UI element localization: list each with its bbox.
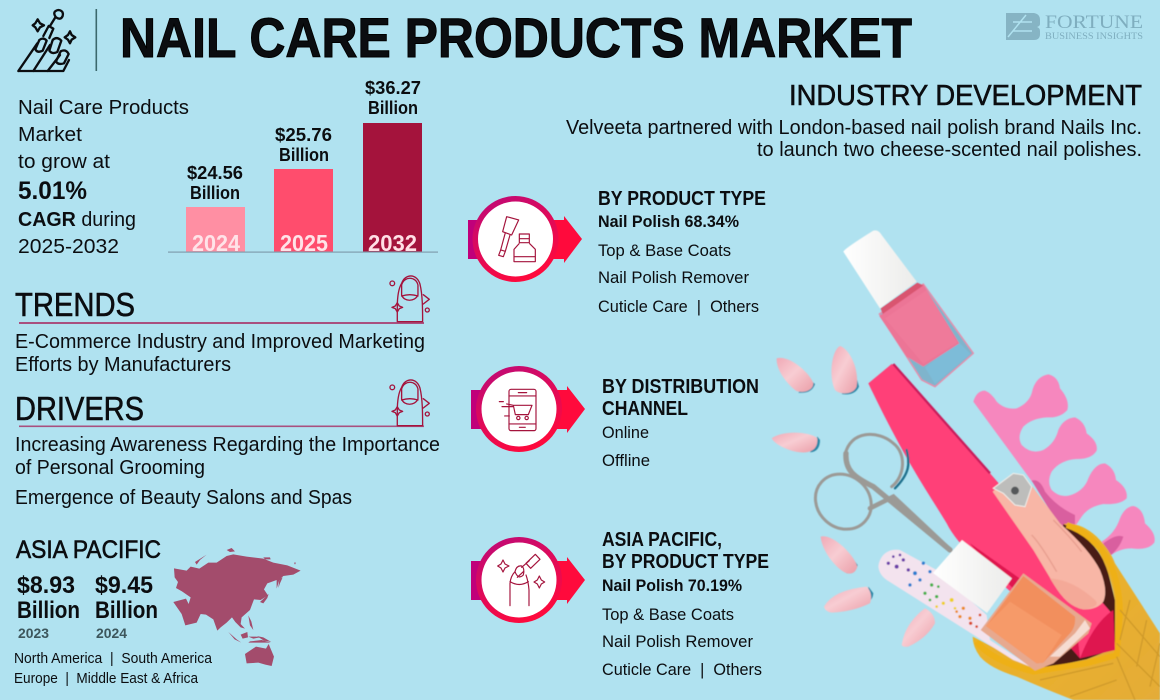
bar 2032 — [363, 78, 422, 256]
map: Asia Pacific — [173, 548, 301, 666]
bottle: pink polish — [843, 230, 973, 387]
text: Asia Pacific by product type: Top & Base Coats — [602, 605, 734, 624]
logo: Fortune Business Insights: FORTUNE — [1045, 12, 1143, 33]
text: Asia Pacific by product type — [602, 529, 769, 679]
text: CAGR summary: 5.01% — [18, 177, 87, 205]
text: trends description: E-Commerce Industry and Improved Marketing — [15, 331, 425, 353]
text: Asia Pacific by product type: Nail Polish Remover — [602, 632, 753, 651]
text: other regions: North America | South America — [14, 651, 213, 667]
badge: distribution channel — [471, 366, 585, 452]
text: by distribution channel: CHANNEL — [602, 398, 688, 420]
text: CAGR summary: 2025-2032 — [18, 236, 119, 258]
icon: nail (trends) — [390, 276, 429, 322]
text: industry development — [566, 80, 1142, 161]
text: by product type: BY PRODUCT TYPE — [598, 188, 766, 210]
value 2024 — [95, 572, 158, 641]
text: drivers description: Increasing Awareness Regarding the Importance — [15, 434, 440, 456]
scissors — [804, 434, 950, 550]
text: by product type: Cuticle Care | Others — [598, 297, 759, 316]
text: trends description — [15, 331, 425, 376]
logo: Fortune Business Insights: BUSINESS INSIGHTS — [1045, 32, 1143, 42]
bar 2025: $25.76 — [275, 125, 332, 145]
icon: polish brush and bottle — [499, 217, 535, 262]
text: by distribution channel — [602, 376, 759, 470]
text: CAGR summary: Nail Care Products — [18, 97, 189, 119]
nail file, rainbow dots — [878, 550, 1032, 667]
nail file, pink — [868, 364, 1115, 658]
logo: Fortune Business Insights — [1006, 12, 1143, 42]
text: by product type: Top & Base Coats — [598, 241, 731, 260]
icon: phone with cart — [499, 389, 536, 431]
title: NAIL CARE PRODUCTS MARKET — [120, 6, 912, 69]
value 2024: Billion — [95, 597, 158, 624]
text: drivers description: of Personal Grooming — [15, 457, 205, 479]
value 2023: $8.93 — [17, 572, 75, 599]
icon: finger with nail brush — [498, 554, 545, 606]
regional panel: Asia Pacific — [14, 536, 301, 687]
bar 2025: 2025 — [280, 230, 328, 256]
text: by product type: Nail Polish Remover — [598, 268, 749, 287]
value 2023: Billion — [17, 597, 80, 624]
ice cream cone — [973, 524, 1160, 700]
text: industry development: Velveeta partnered with London-based nail polish brand Nails Inc. — [566, 117, 1142, 139]
bar 2024: $24.56 — [187, 163, 243, 183]
text: by distribution channel: Offline — [602, 451, 650, 470]
artificial nails — [772, 346, 935, 647]
text: by distribution channel: Online — [602, 423, 649, 442]
title divider — [96, 9, 97, 71]
text: CAGR summary: to grow at — [18, 151, 110, 173]
badge: product type — [468, 196, 582, 282]
value 2023 — [17, 572, 80, 641]
bar chart: market size — [168, 78, 438, 256]
text: Asia Pacific by product type: Nail Polish 70.19% — [602, 576, 742, 595]
value 2024: 2024 — [96, 625, 127, 641]
text: drivers description — [15, 434, 440, 509]
bottle: orange polish — [933, 540, 1092, 671]
bar 2024: Billion — [190, 183, 240, 203]
text: industry development: INDUSTRY DEVELOPMENT — [789, 80, 1142, 112]
toe separator — [973, 374, 1155, 557]
value 2023: 2023 — [18, 625, 49, 641]
bar 2025 — [274, 125, 333, 256]
text: Asia Pacific by product type: Cuticle Care | Others — [602, 660, 762, 679]
text: other regions: Europe | Middle East & Africa — [14, 671, 199, 687]
icon: nail (drivers) — [390, 380, 429, 426]
badge: Asia Pacific product type — [471, 537, 585, 623]
text: Asia Pacific by product type: ASIA PACIFIC, — [602, 529, 722, 551]
text: CAGR summary: Market — [18, 124, 82, 146]
bar 2032: $36.27 — [365, 78, 421, 98]
text: CAGR summary: CAGR during — [18, 209, 136, 231]
bar 2025: Billion — [279, 145, 329, 165]
heading: drivers: DRIVERS — [15, 390, 144, 427]
heading: trends: TRENDS — [15, 286, 135, 323]
text: by product type — [598, 188, 766, 316]
text: by product type: Nail Polish 68.34% — [598, 212, 739, 231]
nail clipper — [993, 473, 1105, 609]
heading: Asia Pacific: ASIA PACIFIC — [16, 536, 161, 564]
text: other regions — [14, 651, 213, 687]
text: by distribution channel: BY DISTRIBUTION — [602, 376, 759, 398]
bar 2024: 2024 — [192, 230, 240, 256]
bar 2032: Billion — [368, 98, 418, 118]
text: industry development: to launch two cheese-scented nail polishes. — [757, 139, 1142, 161]
text: CAGR summary — [18, 97, 189, 258]
bar 2032: 2032 — [368, 230, 417, 256]
value 2024: $9.45 — [95, 572, 153, 599]
text: trends description: Efforts by Manufacturers — [15, 354, 231, 376]
icon: fingers and nail brush — [18, 10, 75, 71]
text: drivers description: Emergence of Beauty Salons and Spas — [15, 487, 352, 509]
text: Asia Pacific by product type: BY PRODUCT TYPE — [602, 551, 769, 573]
bar 2024 — [186, 163, 245, 256]
photo collage: nail care products — [772, 230, 1160, 700]
